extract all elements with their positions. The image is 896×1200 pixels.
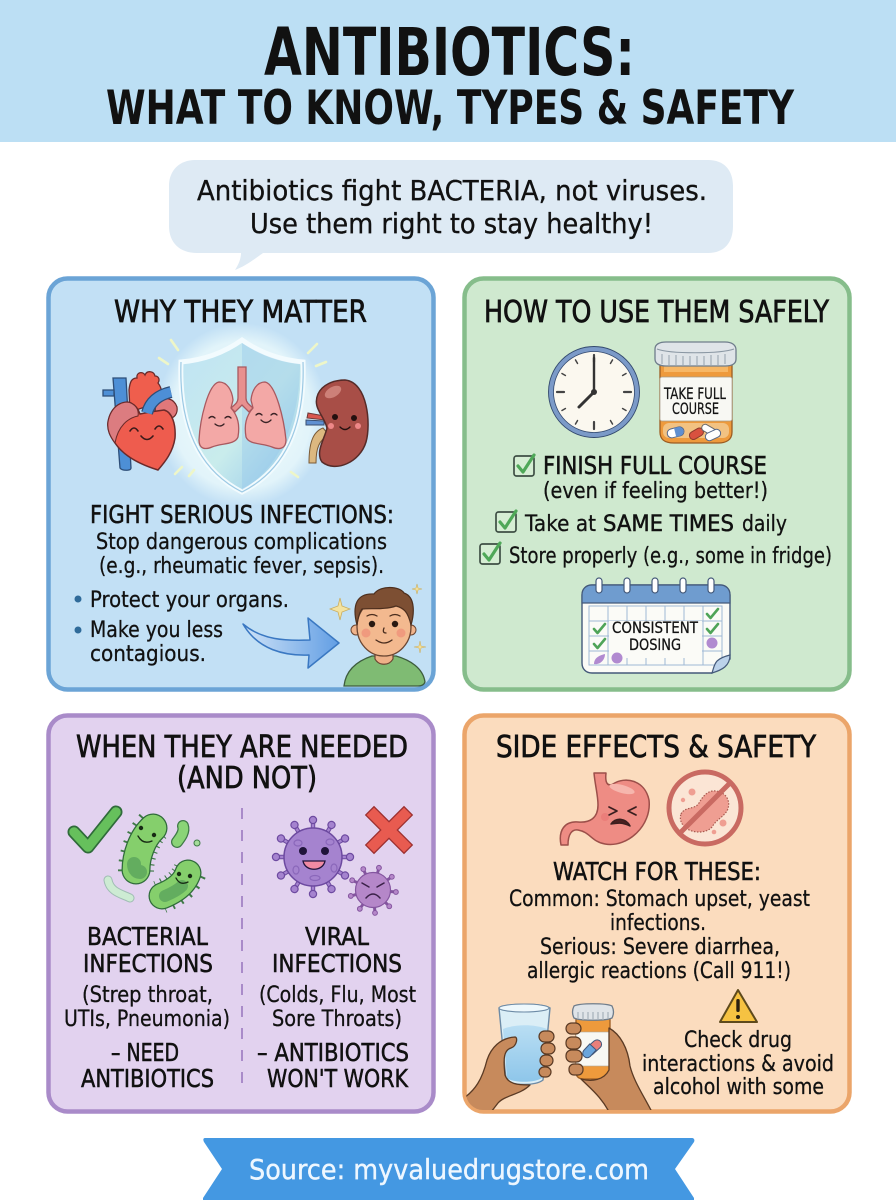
icon: shield with lungs <box>156 323 328 507</box>
source ribbon: Source: myvaluedrugstore.com <box>249 1153 649 1186</box>
column: viral infections: – ANTIBIOTICS <box>257 1038 409 1067</box>
bullet list: contagious. <box>90 642 206 667</box>
column: bacterial infections: (Strep throat, <box>82 983 213 1008</box>
column: viral infections: Sore Throats) <box>272 1007 402 1032</box>
column: viral infections: INFECTIONS <box>272 949 402 978</box>
column: bacterial infections: – NEED <box>111 1038 179 1067</box>
checklist item: finish full course: (even if feeling better!) <box>543 479 768 504</box>
icon: green check <box>74 812 116 847</box>
icon: happy person <box>330 584 426 686</box>
icon: big virus <box>272 816 354 898</box>
text: common and serious effects <box>509 887 810 984</box>
text: complications: Stop dangerous complications <box>96 530 387 555</box>
heading: why they matter: WHY THEY MATTER <box>114 295 367 330</box>
column divider <box>241 808 243 1090</box>
text: complications: (e.g., rheumatic fever, sepsis). <box>99 554 384 579</box>
icon: calendar: CONSISTENT <box>612 618 698 637</box>
subheading: fight serious infections: FIGHT SERIOUS INFECTIONS: <box>90 500 394 529</box>
checklist item: finish full course <box>514 451 768 504</box>
column: bacterial infections: ANTIBIOTICS <box>81 1064 214 1093</box>
icon: calendar: DOSING <box>629 635 681 654</box>
text: common and serious effects: infections. <box>610 911 706 936</box>
icon: heart <box>103 372 177 470</box>
icon: kidney <box>306 380 368 466</box>
icon: upset stomach <box>560 773 649 845</box>
bullet list: Protect your organs. <box>90 588 289 613</box>
column: viral infections <box>257 922 416 1093</box>
text: common and serious effects: allergic reactions (Call 911!) <box>527 959 791 984</box>
column: viral infections: (Colds, Flu, Most <box>259 983 416 1008</box>
checklist item: finish full course: FINISH FULL COURSE <box>543 451 767 480</box>
column: bacterial infections: UTIs, Pneumonia) <box>64 1007 230 1032</box>
heading: when they are needed: (AND NOT) <box>177 761 317 796</box>
column: bacterial infections: BACTERIAL <box>87 922 208 951</box>
checklist item: same times <box>496 511 787 537</box>
icon: hand with water glass <box>464 1004 555 1116</box>
heading: how to use: HOW TO USE THEM SAFELY <box>484 295 830 330</box>
text: common and serious effects: Common: Stomach upset, yeast <box>509 887 810 912</box>
text: drug interactions: alcohol with some <box>653 1075 824 1100</box>
icon: small virus <box>348 865 399 916</box>
panel: side effects and safety <box>464 716 850 1116</box>
icon: pill bottle: COURSE <box>672 399 719 418</box>
checklist item: same times: daily <box>742 512 787 537</box>
column: viral infections: VIRAL <box>305 922 369 951</box>
speech bubble intro: Use them right to stay healthy! <box>250 207 653 240</box>
speech bubble intro: Antibiotics fight BACTERIA, not viruses. <box>197 174 707 207</box>
bullet list <box>74 588 289 667</box>
subheading: watch for these: WATCH FOR THESE: <box>553 857 761 886</box>
title <box>106 14 795 136</box>
panel: why they matter <box>48 278 434 690</box>
icon: pill bottle <box>655 342 736 443</box>
icon: bacteria <box>108 826 200 898</box>
text: common and serious effects: Serious: Severe diarrhea, <box>540 935 780 960</box>
title: ANTIBIOTICS: <box>264 14 635 91</box>
checklist item: same times: SAME TIMES <box>603 512 734 537</box>
heading: when they are needed: WHEN THEY ARE NEEDED <box>76 730 408 765</box>
icon: warning triangle <box>720 990 757 1022</box>
arrow <box>243 618 339 668</box>
icon: no bacteria sign <box>669 772 741 844</box>
panel: when they are needed <box>48 716 434 1112</box>
panel: how to use them safely <box>464 278 850 690</box>
column: bacterial infections: INFECTIONS <box>83 949 213 978</box>
source ribbon <box>203 1138 694 1200</box>
icon: hand with pill bottle <box>566 1004 654 1116</box>
header band <box>0 0 896 142</box>
checklist item: same times: Take at <box>524 512 596 537</box>
bullet list: Make you less <box>90 618 223 643</box>
text: drug interactions <box>642 1028 834 1100</box>
checklist item: store properly: Store properly (e.g., some in fridge) <box>509 544 832 569</box>
text: drug interactions: Check drug <box>684 1028 792 1053</box>
speech bubble intro <box>169 160 733 270</box>
column: bacterial infections <box>64 922 230 1093</box>
icon: red cross <box>374 815 404 845</box>
text: complications <box>96 530 387 579</box>
heading: side effects: SIDE EFFECTS & SAFETY <box>496 730 817 765</box>
icon: lungs <box>199 367 286 449</box>
icon: pill bottle: TAKE FULL <box>663 384 726 403</box>
icon: clock <box>548 346 640 438</box>
text: drug interactions: interactions & avoid <box>642 1052 834 1077</box>
heading: when they are needed <box>76 730 408 796</box>
column: viral infections: WON'T WORK <box>267 1064 408 1093</box>
icon: calendar <box>582 578 730 673</box>
